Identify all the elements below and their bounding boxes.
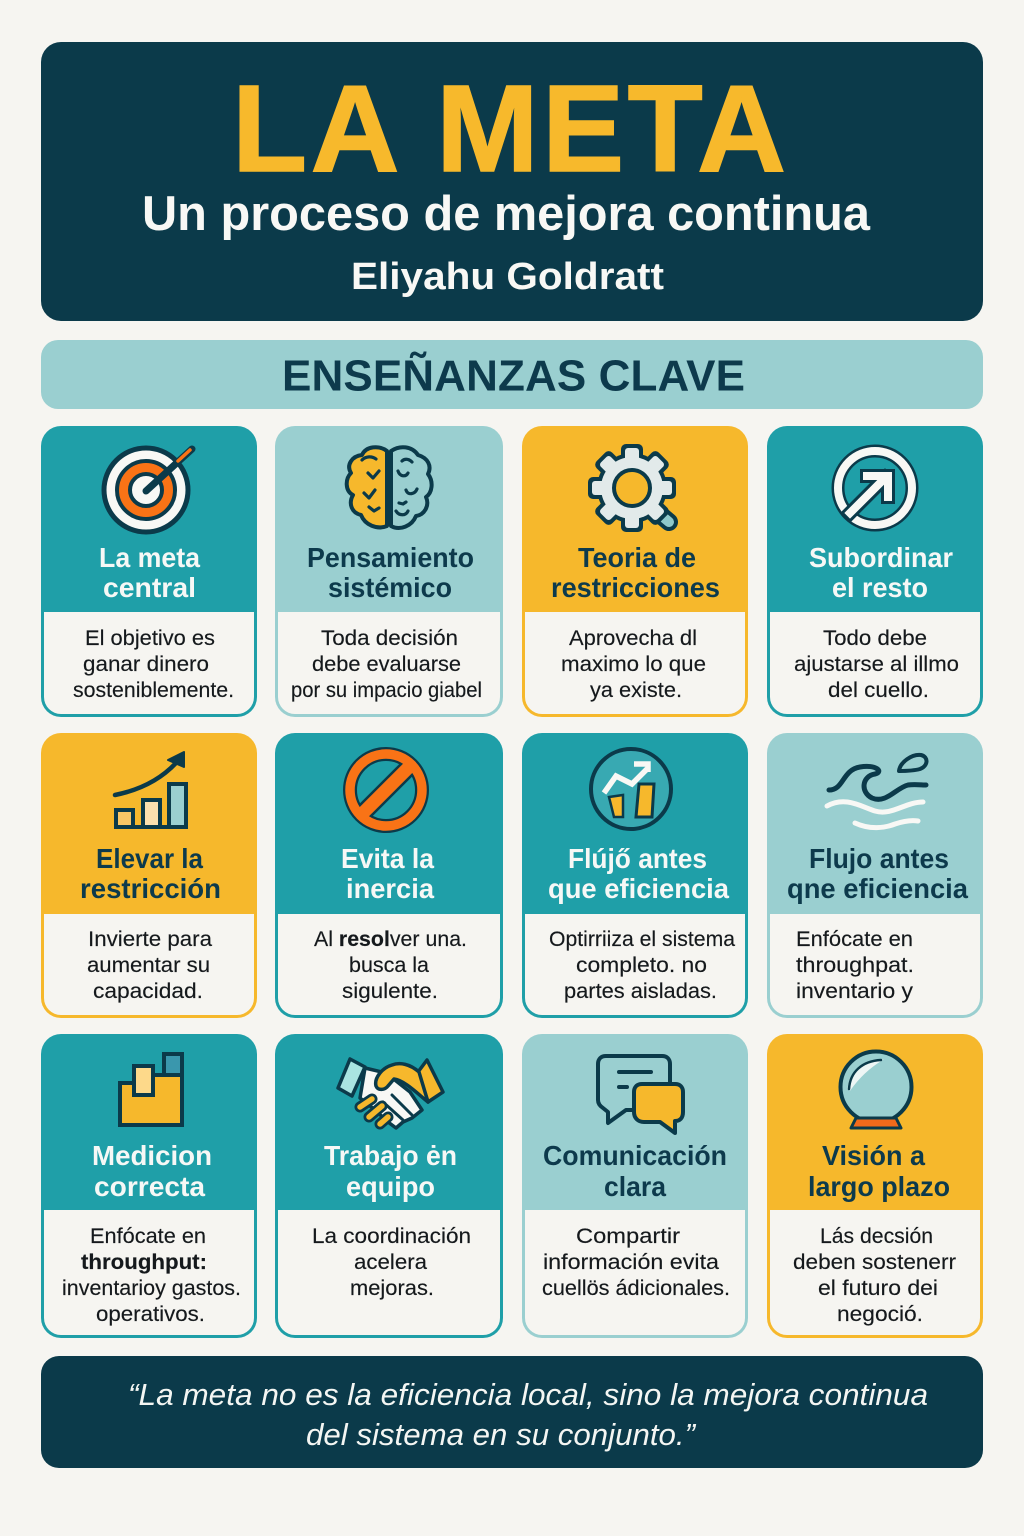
quote panel: “La meta no es la eficiencia local, sino la mejora continua bbox=[128, 1377, 928, 1412]
body text: por su impacio giabel bbox=[291, 678, 482, 702]
section banner: enseñanzas clave bbox=[41, 340, 983, 409]
heading: restricciones bbox=[551, 572, 720, 603]
icon: brain bbox=[347, 447, 432, 528]
icon: waves bbox=[827, 755, 927, 828]
heading bbox=[307, 542, 474, 603]
heading: sistémico bbox=[328, 572, 452, 603]
icon: crystal ball bbox=[840, 1052, 912, 1128]
heading: central bbox=[103, 572, 196, 603]
body text: deben sostenerr bbox=[793, 1250, 956, 1274]
heading bbox=[92, 1140, 212, 1202]
quote panel bbox=[41, 1356, 983, 1468]
body text: maximo lo que bbox=[561, 652, 706, 676]
card: subordinar el resto bbox=[767, 426, 983, 717]
body text: ganar dinero bbox=[83, 652, 209, 676]
body text bbox=[796, 927, 914, 1003]
card: flujo antes que eficiencia (teal) bbox=[522, 733, 748, 1018]
body text: ajustarse al illmo bbox=[794, 652, 959, 676]
body text: información evita bbox=[543, 1250, 719, 1274]
card: la meta central bbox=[41, 426, 257, 717]
body text: El objetivo es bbox=[85, 626, 215, 650]
body text: sigulente. bbox=[342, 979, 438, 1003]
body text bbox=[312, 1224, 471, 1300]
heading: Evita la bbox=[341, 843, 434, 874]
body text: Compartir bbox=[576, 1224, 680, 1248]
heading: Pensamiento bbox=[307, 542, 474, 573]
heading: restricción bbox=[80, 873, 221, 904]
icon: stepped blocks bbox=[120, 1054, 182, 1125]
body text: del cuello. bbox=[828, 678, 929, 702]
body text: throughput: bbox=[81, 1250, 207, 1274]
body text bbox=[291, 626, 482, 702]
icon: chat bubbles bbox=[598, 1056, 683, 1133]
heading: qne eficiencia bbox=[787, 873, 968, 904]
body text: cuellös ádicionales. bbox=[542, 1276, 730, 1300]
heading: Teoria de bbox=[578, 542, 696, 573]
card: visión a largo plazo bbox=[767, 1034, 983, 1338]
heading: La meta bbox=[99, 542, 200, 573]
body text bbox=[73, 626, 234, 702]
body text bbox=[314, 927, 467, 1003]
body text: Lás decsión bbox=[820, 1224, 933, 1248]
icon: prohibition sign bbox=[350, 754, 422, 826]
heading: Flujo antes bbox=[809, 843, 949, 874]
body text: ya existe. bbox=[590, 678, 682, 702]
body text bbox=[561, 626, 706, 702]
card: medición correcta bbox=[41, 1034, 257, 1338]
heading bbox=[99, 542, 200, 603]
card: teoria de restricciones bbox=[522, 426, 748, 717]
heading: el resto bbox=[832, 572, 928, 603]
header panel bbox=[41, 42, 983, 321]
card: pensamiento sistémico bbox=[275, 426, 503, 717]
body text: acelera bbox=[354, 1250, 427, 1274]
body text: Invierte para bbox=[88, 927, 212, 951]
heading: correcta bbox=[94, 1171, 205, 1202]
body text bbox=[549, 927, 735, 1003]
section banner: enseñanzas clave: ENSEÑANZAS CLAVE bbox=[282, 350, 745, 400]
heading: clara bbox=[604, 1171, 666, 1202]
body text: La coordinación bbox=[312, 1224, 471, 1248]
body text: aumentar su bbox=[87, 953, 210, 977]
body text: throughpat. bbox=[796, 953, 914, 977]
icon: circle with arrow bbox=[838, 451, 912, 525]
body text: mejoras. bbox=[350, 1276, 434, 1300]
icon: target bbox=[104, 448, 192, 532]
heading bbox=[787, 843, 968, 904]
body text: Todo debe bbox=[823, 626, 927, 650]
body text: Enfócate en bbox=[796, 927, 913, 951]
body text bbox=[542, 1224, 730, 1300]
heading: que eficiencia bbox=[548, 873, 729, 904]
body text bbox=[793, 1224, 956, 1326]
heading bbox=[341, 843, 434, 904]
heading: Subordinar bbox=[809, 542, 953, 573]
title: LA META bbox=[232, 61, 786, 198]
icon: gear with magnifier bbox=[588, 444, 676, 532]
body text: Al resolver una. bbox=[314, 927, 467, 951]
heading bbox=[324, 1140, 457, 1202]
body text bbox=[62, 1224, 241, 1326]
quote panel: del sistema en su conjunto.” bbox=[306, 1417, 697, 1452]
body text: el futuro dei bbox=[818, 1276, 938, 1300]
icon: handshake bbox=[338, 1059, 443, 1128]
subtitle: Un proceso de mejora continua bbox=[142, 187, 871, 241]
heading: largo plazo bbox=[808, 1171, 950, 1202]
card: flujo antes que eficiencia (light) bbox=[767, 733, 983, 1018]
heading bbox=[548, 843, 729, 904]
body text: operativos. bbox=[96, 1302, 205, 1326]
body text: partes aisladas. bbox=[564, 979, 717, 1003]
heading: Medicion bbox=[92, 1140, 212, 1171]
heading: Visión a bbox=[822, 1140, 925, 1171]
body text: negoció. bbox=[837, 1302, 923, 1326]
heading bbox=[808, 1140, 950, 1202]
card: elevar la restricción bbox=[41, 733, 257, 1018]
body text: debe evaluarse bbox=[312, 652, 461, 676]
body text: Aprovecha dl bbox=[569, 626, 697, 650]
body text: Optirriiza el sistema bbox=[549, 927, 735, 951]
body text: busca la bbox=[349, 953, 429, 977]
author: Eliyahu Goldratt bbox=[351, 256, 664, 298]
body text: inventario y bbox=[796, 979, 913, 1003]
body text bbox=[794, 626, 959, 702]
heading bbox=[543, 1140, 727, 1202]
heading: Trabajo ėn bbox=[324, 1140, 457, 1171]
body text: sosteniblemente. bbox=[73, 678, 234, 702]
icon: flow circle bbox=[591, 749, 671, 829]
body text: completo. no bbox=[576, 953, 707, 977]
heading: Flújő antes bbox=[568, 843, 707, 874]
heading bbox=[80, 843, 221, 904]
heading: equipo bbox=[346, 1171, 435, 1202]
body text: capacidad. bbox=[93, 979, 203, 1003]
body text bbox=[87, 927, 212, 1003]
body text: Toda decisión bbox=[321, 626, 458, 650]
card: evita la inercia bbox=[275, 733, 503, 1018]
card: comunicación clara bbox=[522, 1034, 748, 1338]
body text: inventarioy gastos. bbox=[62, 1276, 241, 1300]
heading bbox=[551, 542, 720, 603]
heading bbox=[809, 542, 953, 603]
card: trabajo en equipo bbox=[275, 1034, 503, 1338]
icon: rising bar chart bbox=[114, 752, 188, 827]
heading: inercia bbox=[346, 873, 434, 904]
heading: Comunicación bbox=[543, 1140, 727, 1171]
heading: Elevar la bbox=[96, 843, 203, 874]
body text: Enfócate en bbox=[90, 1224, 206, 1248]
